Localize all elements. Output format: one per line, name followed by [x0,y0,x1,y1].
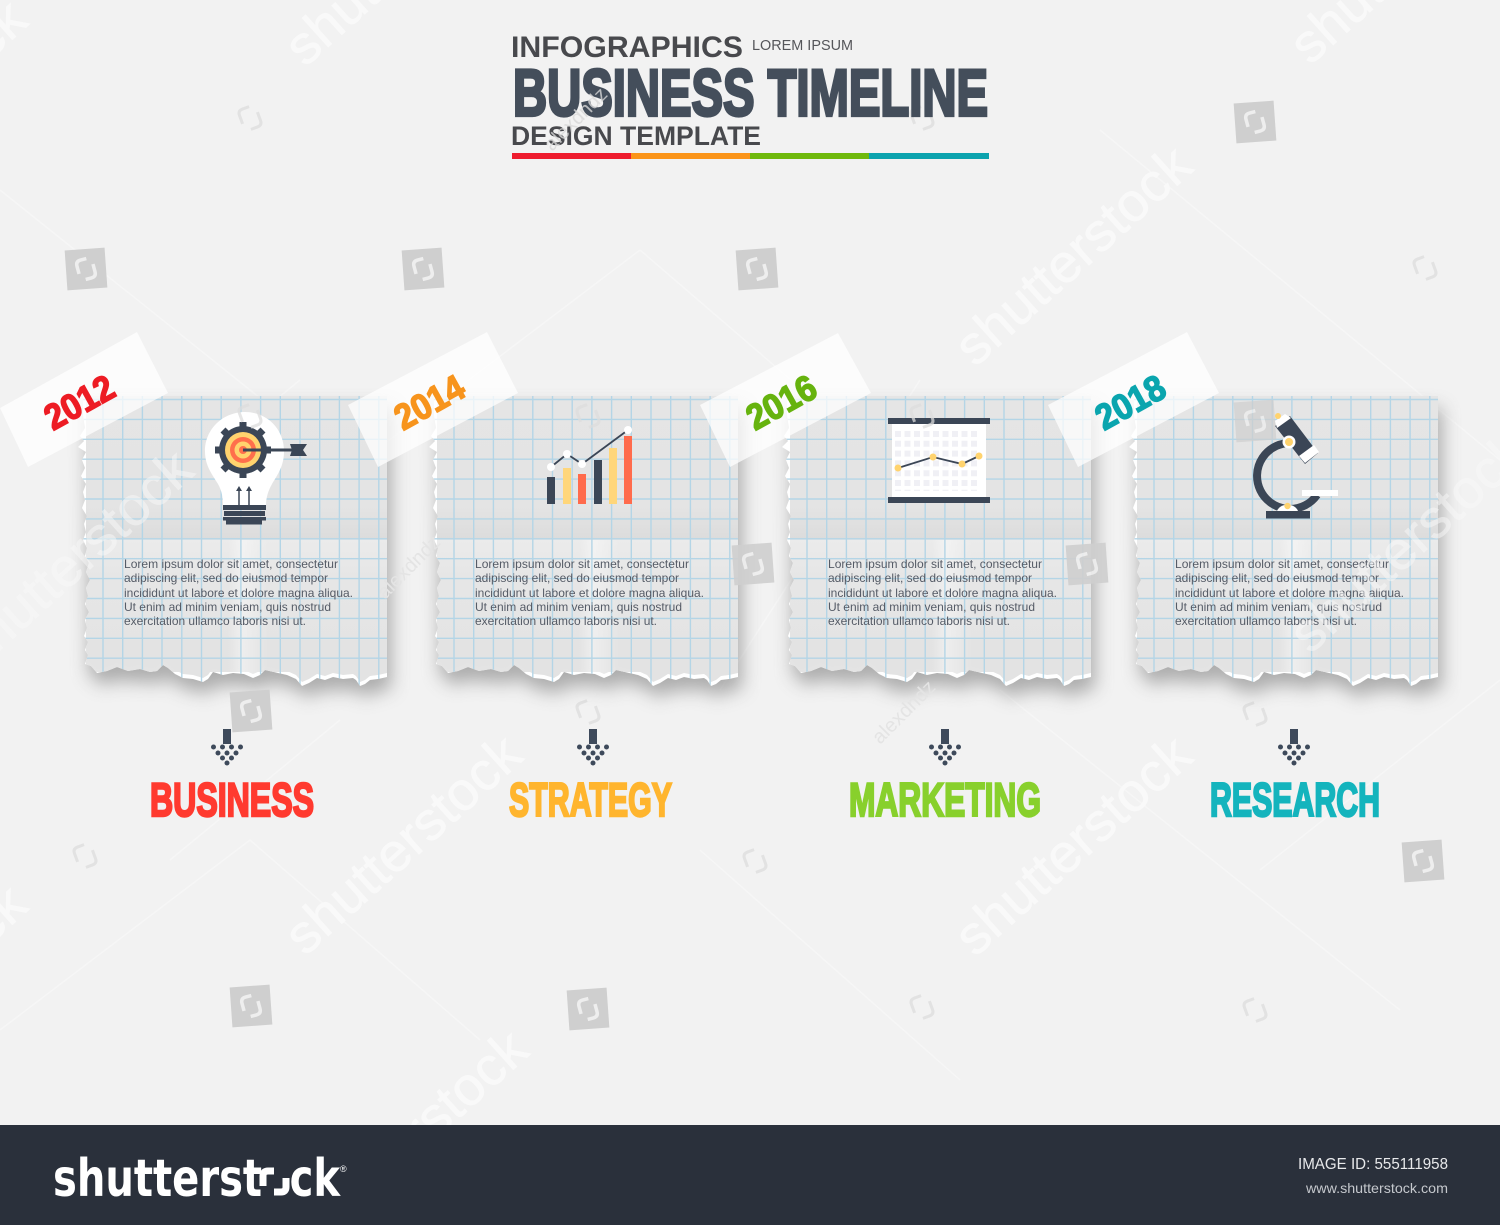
tag: 2014 [348,332,518,467]
icon: light bulb with target [205,412,307,524]
description text: incididunt ut labore et dolore magna aliqua. [828,586,1057,600]
description text: Lorem ipsum dolor sit amet, consectetur [828,557,1042,571]
label: business: BUSINESS [150,773,314,826]
watermark layer: shutterstock [273,723,534,966]
arrow: research [1278,729,1310,766]
panel: 2014 strategy [429,394,742,698]
description text: adipiscing elit, sed do eiusmod tempor [1175,571,1379,585]
year: 2016 [739,366,824,438]
tag: 2012 [0,332,168,467]
tag: 2016 [700,333,871,467]
image id: IMAGE ID: 555111958 [1298,1156,1448,1173]
icon: microscope [1257,413,1338,518]
main title: BUSINESS TIMELINE [513,56,988,130]
description text: Ut enim ad minim veniam, quis nostrud [1175,600,1382,614]
description text: Ut enim ad minim veniam, quis nostrud [828,600,1035,614]
torn grid paper [429,394,742,698]
description text: Lorem ipsum dolor sit amet, consectetur [475,557,689,571]
description text: exercitation ullamco laboris nisi ut. [828,614,1010,628]
registered mark: ® [340,1164,347,1174]
description text [124,557,353,628]
logo bracket mark [263,1171,286,1192]
label: strategy: STRATEGY [509,773,672,826]
description text [475,557,704,628]
torn grid paper [1129,394,1442,698]
description text: exercitation ullamco laboris nisi ut. [124,614,306,628]
tag: 2018 [1048,332,1219,467]
header title block [511,31,989,159]
description text: Ut enim ad minim veniam, quis nostrud [475,600,682,614]
footer logo: shutterstock [53,1149,341,1209]
description text: adipiscing elit, sed do eiusmod tempor [475,571,679,585]
description text: adipiscing elit, sed do eiusmod tempor [828,571,1032,585]
panel: 2016 marketing [782,394,1095,698]
watermark layer: shutterstock [943,134,1204,377]
watermark over panels: alexdndz [540,83,612,156]
tape [700,333,871,467]
description text: adipiscing elit, sed do eiusmod tempor [124,571,328,585]
year: 2012 [37,366,122,438]
icon: bar chart [547,426,632,504]
tape [1048,332,1219,467]
arrow: marketing [929,729,961,766]
heading: design template: DESIGN TEMPLATE [511,121,761,151]
panel: 2012 business [78,394,391,698]
description text: exercitation ullamco laboris nisi ut. [475,614,657,628]
description text [828,557,1057,628]
description text: incididunt ut labore et dolore magna aliqua. [1175,586,1404,600]
description text: exercitation ullamco laboris nisi ut. [1175,614,1357,628]
watermark over panels: alexdndz [868,676,940,749]
label: research: RESEARCH [1210,773,1380,826]
description text: incididunt ut labore et dolore magna aliqua. [124,586,353,600]
subheading: lorem ipsum: LOREM IPSUM [752,37,853,54]
panel: 2018 research [1129,394,1442,698]
year: 2014 [387,366,472,438]
arrow: strategy [577,729,609,766]
website: www.shutterstock.com [1305,1180,1448,1196]
description text [1175,557,1404,628]
description text: Lorem ipsum dolor sit amet, consectetur [1175,557,1389,571]
icon: presentation board [888,418,990,503]
watermark over panels: alexdndz [373,531,445,604]
tape [0,332,168,467]
label: marketing: MARKETING [849,773,1041,826]
colour bar [512,153,989,159]
heading: infographics: INFOGRAPHICS [511,31,743,64]
watermark over panels [0,83,1500,749]
arrow: business [211,729,243,766]
watermark layer: shutterstock [943,724,1204,967]
description text: incididunt ut labore et dolore magna aliqua. [475,586,704,600]
torn grid paper [782,394,1095,698]
footer bar [0,1125,1500,1225]
year: 2018 [1088,366,1173,438]
description text: Lorem ipsum dolor sit amet, consectetur [124,557,338,571]
tape [348,332,518,467]
description text: Ut enim ad minim veniam, quis nostrud [124,600,331,614]
torn grid paper [78,394,391,698]
